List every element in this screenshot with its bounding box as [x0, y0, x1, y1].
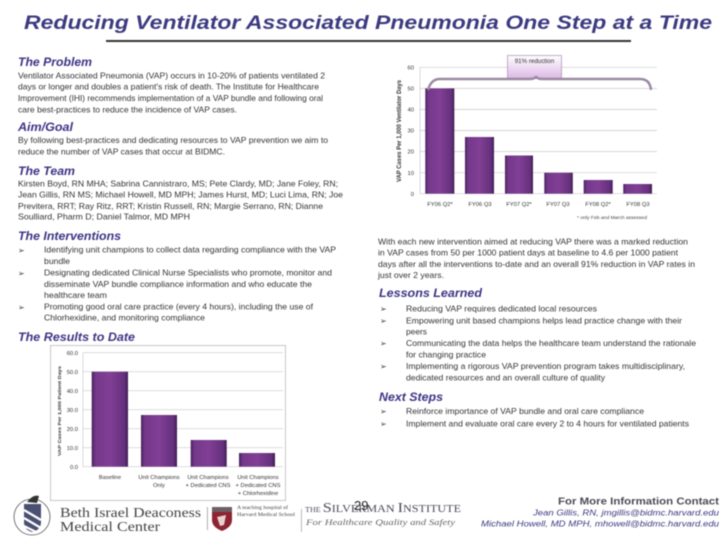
- text: Harvard affiliation: A teaching hospital of: [237, 506, 288, 511]
- list: next steps: ➢: [380, 407, 387, 416]
- x-axis labels: Unit Champions: [187, 475, 229, 481]
- panel: the interventions: [18, 231, 337, 322]
- list: interventions: Promoting good oral care practice (every 4 hours), including the use of: [44, 302, 314, 312]
- text: results summary: days after all the interventions to-date and an overall 91% reduction in VAP rates in: [378, 260, 695, 269]
- panel: the problem: [18, 57, 325, 114]
- list: interventions: Designating dedicated Clinical Nurse Specialists who promote, monitor and: [44, 268, 332, 278]
- list: lessons: for changing practice: [406, 350, 486, 360]
- text: results summary: in VAP cases from 50 per 1000 patient days at baseline to 4.6 per 1000 patient: [378, 248, 679, 258]
- text: team members: Previtera, RRT; Ray Ritz, RRT; Kristin Russell, RN; Margie Serrano, RN; Dianne: [18, 202, 323, 211]
- text: Harvard affiliation: Harvard Medical School: [237, 513, 296, 518]
- y-axis labels: 20.0: [67, 427, 78, 433]
- list: interventions: Chlorhexidine, and monitoring compliance: [44, 314, 205, 322]
- text: team members: Kirsten Boyd, RN MHA; Sabrina Cannistraro, MS; Pete Clardy, MD; Jane Foley, RN;: [18, 180, 338, 188]
- list: lessons: peers: [406, 328, 427, 336]
- x-axis labels: Baseline: [99, 475, 121, 481]
- logo text: The Silverman Institute: [305, 501, 461, 527]
- bars: [92, 372, 275, 467]
- list: interventions: ➢: [18, 246, 25, 255]
- text: problem description: Ventilator Associated Pneumonia (VAP) occurs in 10-20% of patients ventilated 2: [18, 72, 325, 80]
- x-axis labels: Unit Champions: [138, 475, 180, 481]
- logo text: Beth Israel Deaconess Medical Center: Medical Center: [60, 519, 161, 534]
- text: results summary: just over 2 years.: [377, 271, 444, 280]
- text: problem description: Improvement (IHI) recommends implementation of a VAP bundle and following oral: [18, 94, 323, 103]
- bars: [425, 88, 652, 194]
- list: lessons: ➢: [380, 316, 387, 326]
- x-axis labels: FY08 Q2*: [585, 202, 611, 208]
- y-axis title: VAP Cases Per 1,000 Ventilator Days: [397, 79, 403, 182]
- y-axis labels: 0.0: [70, 465, 78, 471]
- text: problem description: [18, 72, 325, 114]
- x-axis labels: FY07 Q2*: [506, 202, 532, 208]
- text: contact details: [481, 508, 720, 528]
- text: team members: Jean Gillis, RN MS; Michael Howell, MD MPH; James Hurst, MD; Luci Lima, RN; Joe: [18, 190, 343, 200]
- heading: lessons learned: Lessons Learned: [379, 288, 483, 300]
- panel: contact information: [481, 496, 720, 528]
- bar chart: VAP cases by intervention: [50, 346, 286, 500]
- list: lessons: [380, 304, 696, 382]
- list: lessons: Communicating the data helps the healthcare team understand the rationale: [406, 339, 696, 348]
- list: lessons: ➢: [380, 304, 387, 314]
- panel: aim and goal: [17, 122, 328, 156]
- text: results summary: [377, 238, 695, 280]
- text: team members: Soulliard, Pharm D; Daniel Talmor, MD MPH: [18, 212, 190, 222]
- logo: Beth Israel Deaconess seal: [14, 496, 50, 535]
- y-axis labels: 60.0: [67, 351, 78, 357]
- list: next steps: Reinforce importance of VAP bundle and oral care compliance: [406, 407, 644, 416]
- list: next steps: Implement and evaluate oral care every 2 to 4 hours for ventilated patients: [406, 420, 689, 428]
- y-axis labels: 20: [408, 150, 414, 156]
- logo: Harvard Medical School shield: [212, 507, 232, 531]
- text: contact details: Michael Howell, MD MPH, mhowell@bidmc.harvard.edu: [481, 520, 720, 528]
- x-axis labels: [427, 202, 650, 208]
- bracket: [428, 77, 651, 90]
- x-axis labels: FY06 Q2*: [427, 202, 453, 208]
- y-axis labels: 30: [408, 128, 414, 134]
- text: results summary: With each new intervention aimed at reducing VAP there was a marked reduction: [378, 238, 688, 246]
- x-axis labels: + Chlorhexidine: [238, 491, 278, 497]
- list: interventions: bundle: [44, 257, 70, 266]
- title: Reducing Ventilator Associated Pneumonia One Step at a Time: [24, 12, 712, 34]
- heading: for more information: For More Information Contact: [558, 496, 720, 508]
- y-axis labels: 40.0: [67, 389, 78, 395]
- x-axis labels: [99, 475, 281, 497]
- text: aim description: By following best-practices and dedicating resources to VAP prevention we aim to: [18, 136, 328, 145]
- logo text: Beth Israel Deaconess Medical Center: [60, 505, 201, 534]
- heading: the team: The Team: [18, 166, 75, 178]
- y-axis labels: 10.0: [67, 446, 78, 452]
- y-axis labels: [408, 66, 414, 198]
- text: contact details: Jean Gillis, RN, jmgillis@bidmc.harvard.edu: [532, 508, 720, 518]
- list: interventions: [18, 246, 337, 322]
- callout: 91% reduction: 91% reduction: [515, 58, 555, 65]
- footnote: * only Feb and March assessed: [577, 215, 647, 221]
- logo text: The Silverman Institute: For Healthcare Quality and Safety: [305, 517, 455, 527]
- text: problem description: days or longer and doubles a patient's risk of death. The Institute for Healthcare: [18, 82, 319, 92]
- bar chart: VAP cases per quarter: [397, 56, 657, 221]
- list: interventions: ➢: [18, 269, 25, 278]
- heading: aim/goal: Aim/Goal: [17, 122, 74, 134]
- list: lessons: ➢: [380, 339, 387, 348]
- y-axis title: VAP Cases Per 1,000 Patient Days: [57, 365, 62, 456]
- text: aim description: [18, 136, 328, 156]
- x-axis labels: + Dedicated CNS: [186, 483, 231, 489]
- y-axis labels: [67, 351, 78, 471]
- x-axis labels: FY08 Q3: [626, 202, 650, 208]
- heading: next steps: Next Steps: [379, 392, 443, 404]
- y-axis labels: 10: [408, 171, 414, 177]
- logo text: Beth Israel Deaconess Medical Center: Beth Israel Deaconess: [60, 505, 201, 520]
- list: lessons: ➢: [380, 362, 387, 371]
- list: interventions: disseminate VAP bundle compliance information and who educate the: [44, 280, 312, 289]
- y-axis labels: 30.0: [67, 408, 78, 414]
- y-axis labels: 40: [408, 108, 414, 114]
- heading: the interventions: The Interventions: [18, 231, 121, 243]
- list: lessons: Empowering unit based champions helps lead practice change with their: [406, 316, 682, 326]
- text: team members: [18, 180, 343, 222]
- list: next steps: ➢: [380, 420, 387, 428]
- x-axis labels: FY07 Q3: [546, 202, 570, 208]
- list: lessons: Implementing a rigorous VAP prevention program takes multidisciplinary,: [406, 362, 685, 371]
- list: lessons: Reducing VAP requires dedicated local resources: [406, 304, 597, 314]
- text: Harvard affiliation: [237, 506, 296, 518]
- panel: next steps: [379, 392, 689, 428]
- list: interventions: Identifying unit champions to collect data regarding compliance with the VAP: [44, 246, 337, 254]
- text: problem description: care best-practices to reduce the incidence of VAP cases.: [18, 106, 237, 114]
- panel: the team: [18, 166, 343, 222]
- list: interventions: ➢: [18, 303, 25, 312]
- page number: 29: [354, 498, 368, 513]
- x-axis labels: FY06 Q3: [468, 202, 492, 208]
- callout: 91% reduction: [508, 56, 562, 78]
- panel: lessons learned: [379, 288, 696, 382]
- x-axis labels: Unit Champions: [237, 475, 279, 481]
- heading: the results to date: The Results to Date: [18, 332, 136, 344]
- heading: the problem: The Problem: [18, 57, 92, 69]
- text: aim description: reduce the number of VAP cases that occur at BIDMC.: [18, 148, 225, 156]
- list: lessons: dedicated resources and an overall culture of quality: [406, 374, 606, 382]
- y-axis labels: 50.0: [67, 370, 78, 376]
- logo text: The Silverman Institute: THE SILVERMAN INSTITUTE: [305, 501, 461, 516]
- list: next steps: [380, 407, 689, 428]
- x-axis labels: Only: [153, 483, 165, 489]
- y-axis labels: 50: [408, 86, 414, 92]
- y-axis labels: 0: [411, 192, 414, 198]
- y-axis labels: 60: [408, 66, 414, 72]
- list: interventions: healthcare team: [44, 291, 107, 300]
- x-axis labels: + Dedicated CNS: [236, 483, 281, 489]
